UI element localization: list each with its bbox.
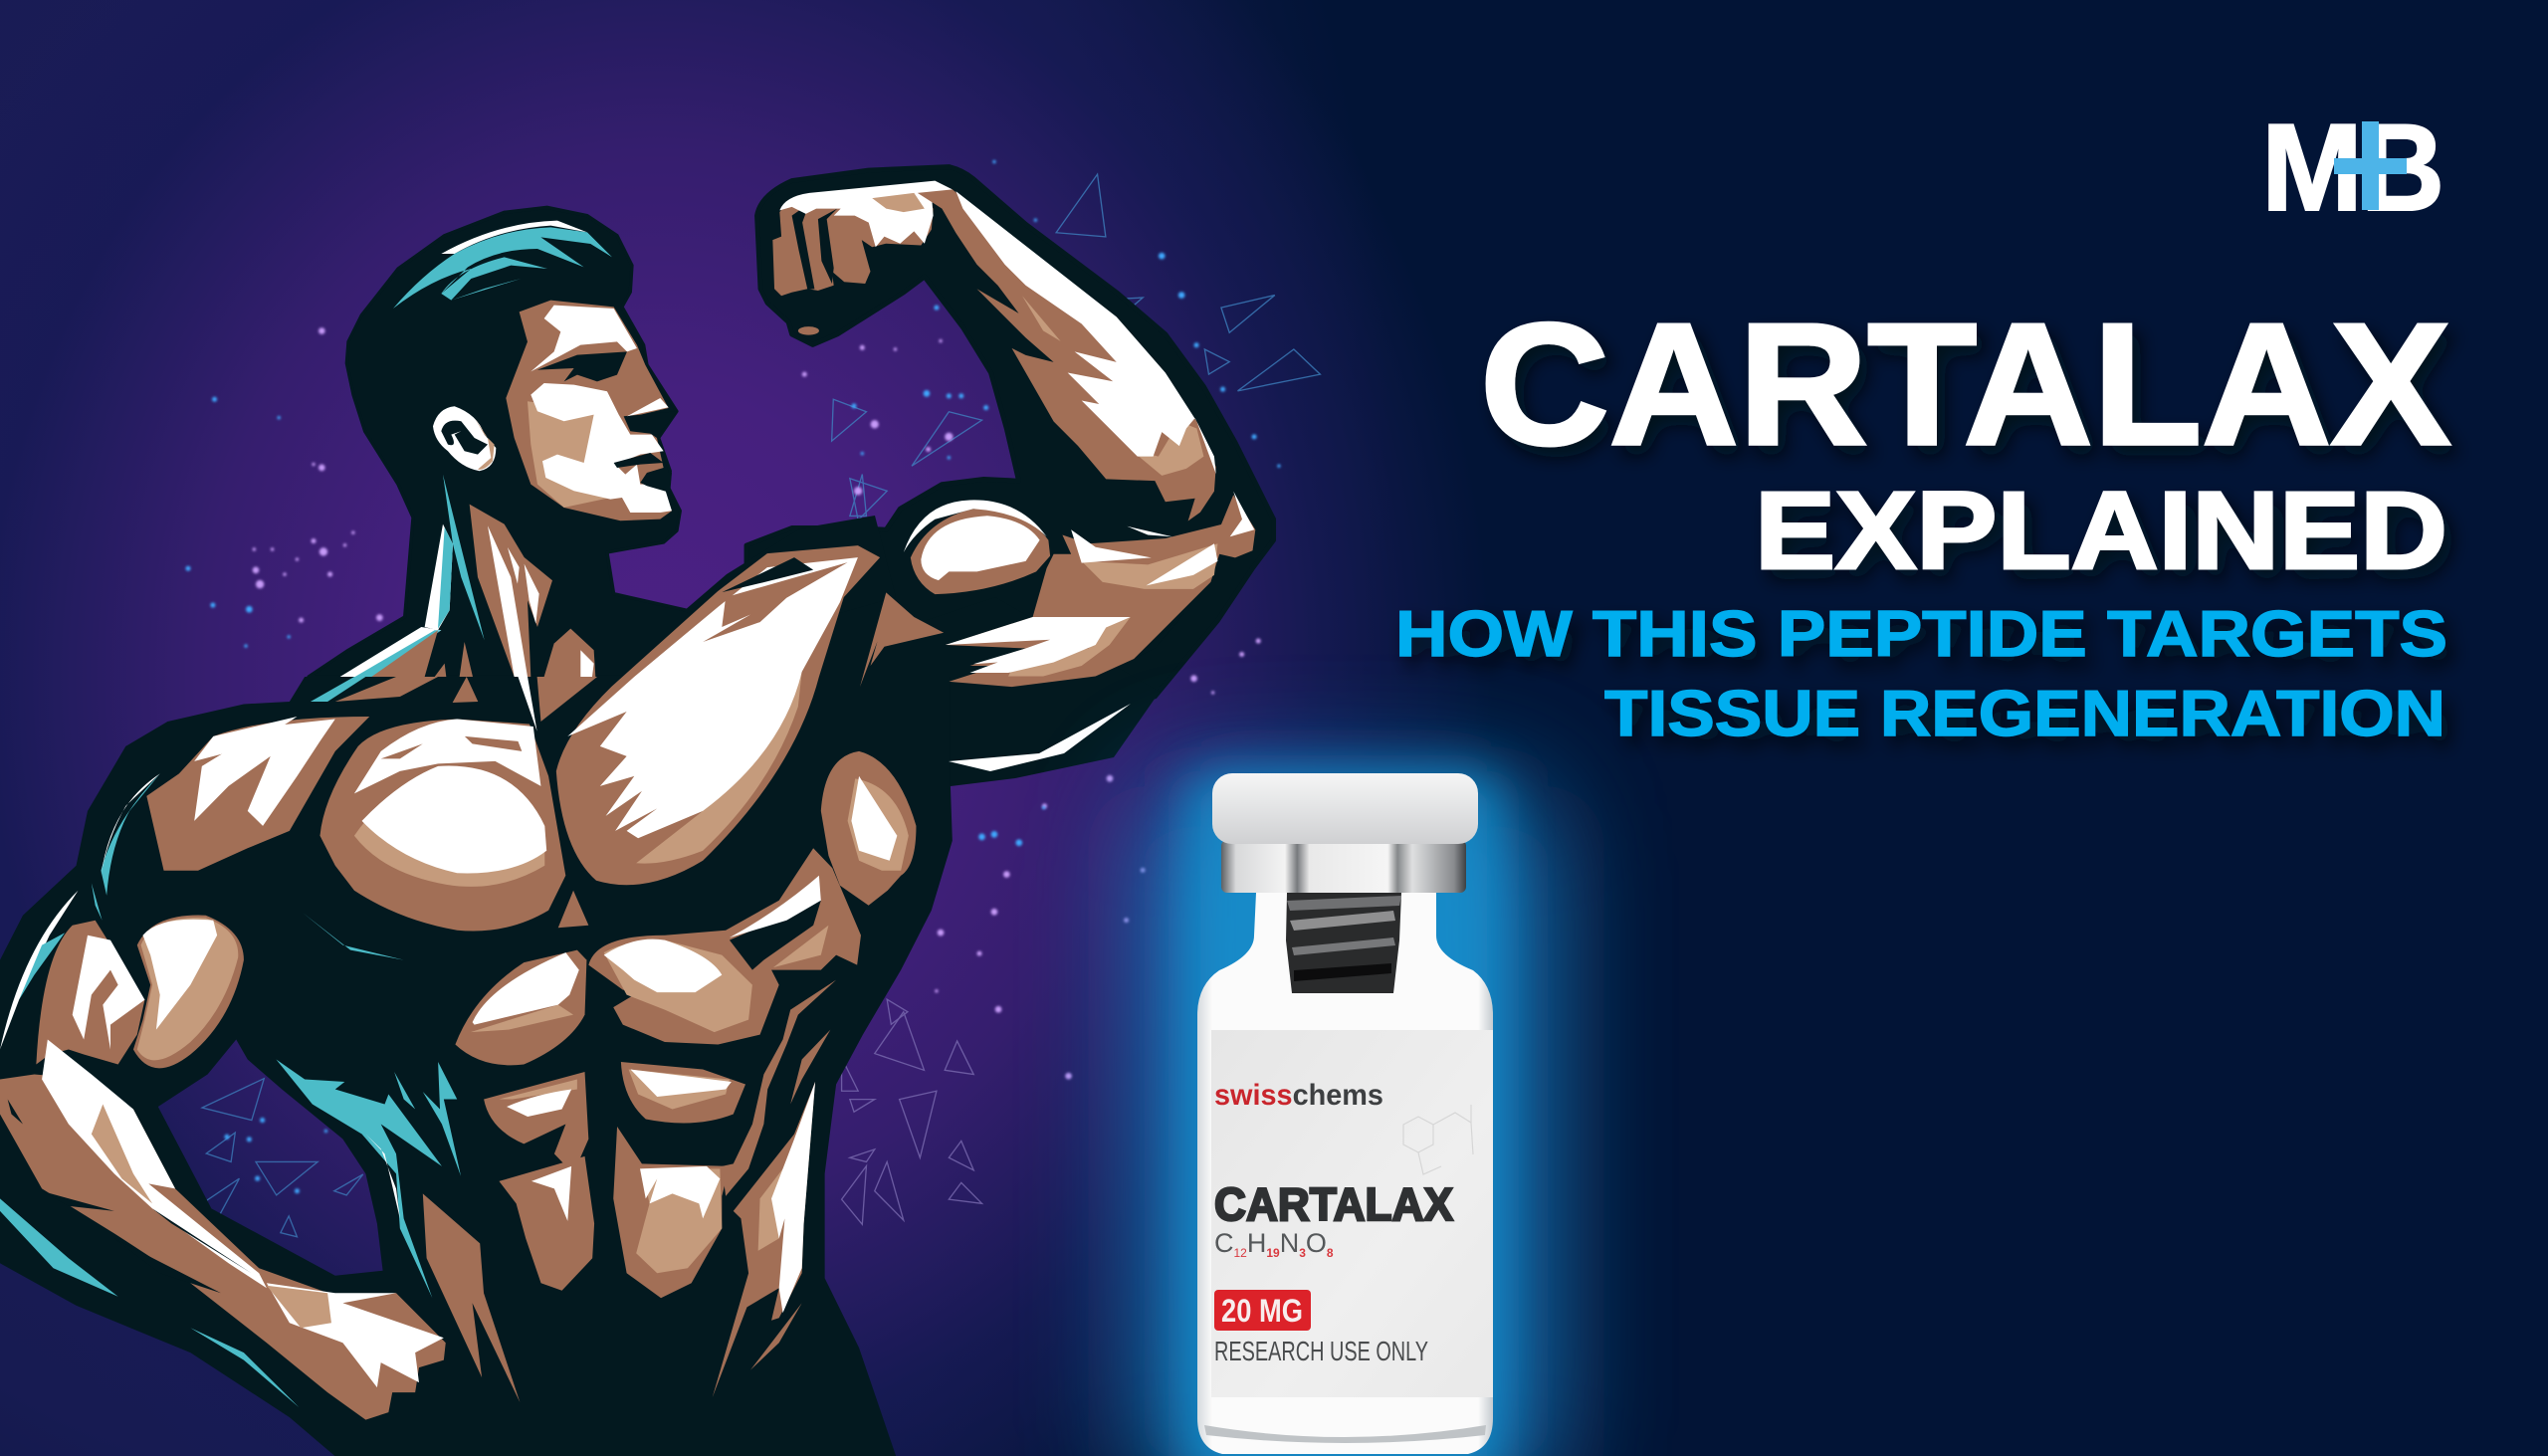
forearm xyxy=(918,189,1216,520)
chest: left pectoral xyxy=(0,677,597,1420)
left forearm and hand xyxy=(0,1040,446,1420)
vial glow xyxy=(1145,771,1548,1456)
label formula: 12 xyxy=(1234,1246,1247,1260)
body silhouette xyxy=(0,167,1274,1456)
left upper arm xyxy=(0,891,244,1068)
lower abs xyxy=(499,1127,730,1298)
label formula: N xyxy=(1280,1228,1299,1258)
label disclaimer: RESEARCH USE ONLY xyxy=(1214,1336,1428,1366)
arm underside highlight xyxy=(949,704,1131,771)
vial label xyxy=(1211,1030,1493,1397)
obliques xyxy=(713,980,836,1397)
hair highlights xyxy=(393,221,612,309)
particles and triangles behind the figure xyxy=(186,160,1320,1237)
label formula: 3 xyxy=(1299,1246,1306,1260)
label formula: 8 xyxy=(1327,1246,1334,1260)
face xyxy=(506,301,677,520)
fist xyxy=(772,181,953,335)
label formula: H xyxy=(1247,1228,1266,1258)
title: CARTALAX: CARTALAX xyxy=(1480,287,2450,481)
label brand: swisschems xyxy=(1214,1079,1383,1112)
subtitle line 1: HOW THIS PEPTIDE TARGETS xyxy=(1395,597,2447,670)
torso side accents xyxy=(276,677,597,1402)
chest: right pectoral and deltoid xyxy=(556,545,880,885)
label dose badge: 20 MG xyxy=(1221,1293,1303,1329)
logo: B xyxy=(2361,100,2444,237)
biceps xyxy=(860,500,1050,687)
label formula: 19 xyxy=(1266,1246,1280,1260)
raised arm and fist xyxy=(772,181,1255,687)
elbow and triceps xyxy=(946,492,1255,687)
left shoulder xyxy=(92,717,369,921)
middle abs xyxy=(484,1062,745,1173)
product vial xyxy=(1197,773,1493,1454)
neck and trapezius xyxy=(340,475,595,677)
vial glass body xyxy=(1197,893,1493,1454)
label product name: CARTALAX xyxy=(1214,1178,1453,1230)
logo xyxy=(2261,100,2444,237)
abdominal muscles and lat xyxy=(455,751,916,1397)
ear xyxy=(433,406,496,471)
subtitle line 2: TISSUE REGENERATION xyxy=(1604,677,2445,749)
title: EXPLAINED: EXPLAINED xyxy=(1755,470,2447,592)
label molecule graphic xyxy=(1403,1105,1473,1174)
vial cap xyxy=(1212,773,1478,844)
label formula: O xyxy=(1306,1228,1327,1258)
upper abs xyxy=(455,848,861,1065)
head xyxy=(340,221,677,677)
logo: M xyxy=(2261,100,2363,237)
figure: muscular man flexing xyxy=(0,167,1274,1456)
vial base glass shading xyxy=(1204,1425,1486,1443)
vial metal collar xyxy=(1221,840,1466,893)
label formula: C xyxy=(1214,1228,1234,1258)
vial rubber stopper xyxy=(1286,893,1401,993)
lat muscle xyxy=(821,751,916,906)
